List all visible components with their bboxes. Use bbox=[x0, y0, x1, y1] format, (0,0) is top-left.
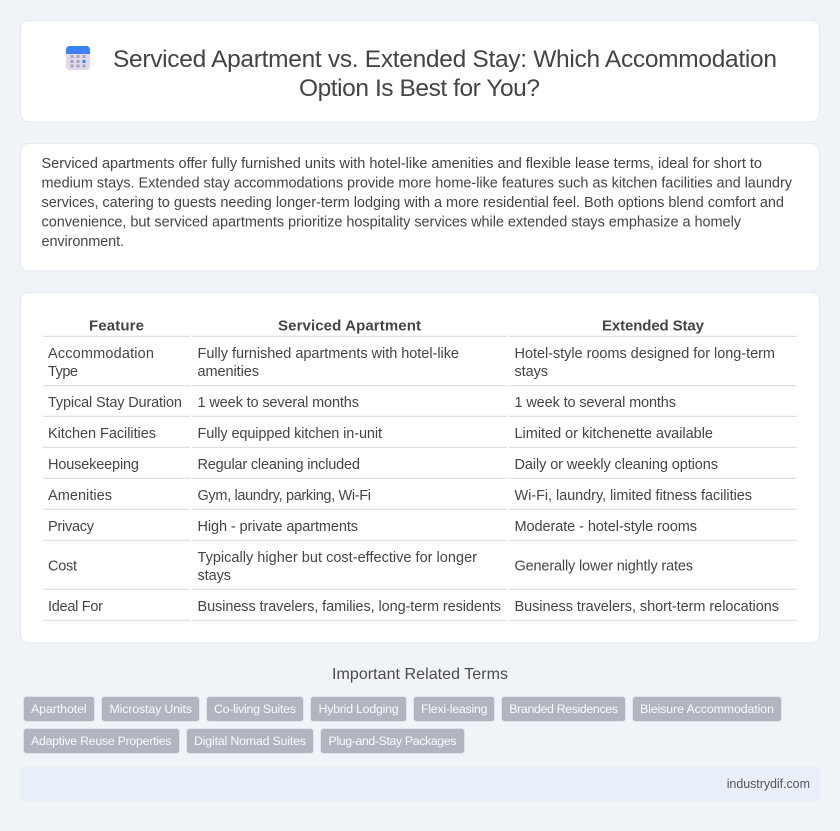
row: typical stay duration: 1 week to several months bbox=[514, 395, 676, 411]
related term tags bbox=[24, 696, 782, 754]
tag: Co-living Suites: Co-living Suites bbox=[214, 702, 296, 716]
title: Serviced Apartment vs. Extended Stay: Which Accommodation bbox=[113, 46, 777, 73]
row: ideal for: Business travelers, short-term relocations bbox=[514, 599, 779, 615]
row: ideal for bbox=[48, 599, 779, 615]
row: privacy: Privacy bbox=[48, 519, 95, 535]
tag: Flexi-leasing bbox=[414, 696, 494, 722]
row: amenities: Wi-Fi, laundry, limited fitness facilities bbox=[514, 488, 752, 504]
row: accommodation type: amenities bbox=[198, 364, 259, 380]
panel: title header bbox=[20, 20, 820, 122]
row: cost: stays bbox=[198, 568, 231, 584]
row: kitchen facilities: Kitchen Facilities bbox=[48, 426, 156, 442]
tag: Plug-and-Stay Packages: Plug-and-Stay Packages bbox=[328, 734, 456, 748]
tag: Aparthotel: Aparthotel bbox=[31, 702, 87, 716]
tag: Branded Residences bbox=[502, 696, 626, 722]
tag: Digital Nomad Suites bbox=[186, 728, 314, 754]
row: privacy: Moderate - hotel-style rooms bbox=[514, 519, 697, 535]
tag: Microstay Units: Microstay Units bbox=[110, 702, 192, 716]
intro paragraph: convenience, but serviced apartments prioritize hospitality services while extended stays emphasize a homely bbox=[42, 215, 742, 231]
table header row: Serviced Apartment bbox=[278, 318, 421, 335]
footer source text: industrydif.com bbox=[727, 777, 810, 791]
row: typical stay duration: Typical Stay Duration bbox=[48, 395, 182, 411]
row: ideal for: Business travelers, families, long-term residents bbox=[198, 599, 501, 615]
tag: Aparthotel bbox=[24, 696, 94, 722]
row: cost: Cost bbox=[48, 558, 77, 574]
tag: Adaptive Reuse Properties: Adaptive Reuse Properties bbox=[31, 734, 172, 748]
row: accommodation type: Type bbox=[48, 364, 78, 380]
row: accommodation type: stays bbox=[514, 364, 548, 380]
table header row: Extended Stay bbox=[602, 318, 705, 335]
tag: Hybrid Lodging: Hybrid Lodging bbox=[318, 702, 399, 716]
row: accommodation type: Accommodation bbox=[48, 346, 154, 362]
row: privacy: High - private apartments bbox=[198, 519, 358, 535]
tag: Flexi-leasing: Flexi-leasing bbox=[421, 702, 488, 716]
tag: Microstay Units bbox=[102, 696, 200, 722]
intro paragraph: Serviced apartments offer fully furnished units with hotel-like amenities and flexible lease terms, ideal for short to bbox=[42, 156, 762, 172]
panel: introduction bbox=[20, 144, 820, 271]
tag: Digital Nomad Suites: Digital Nomad Suites bbox=[194, 734, 306, 748]
intro paragraph: medium stays. Extended stay accommodations provide more home-like features such as kitchen facilities and laundry bbox=[42, 176, 793, 192]
row: accommodation type bbox=[48, 346, 775, 380]
tag: Hybrid Lodging bbox=[310, 696, 406, 722]
row: amenities bbox=[48, 488, 752, 504]
table grid lines bbox=[43, 336, 797, 620]
row: typical stay duration: 1 week to several months bbox=[198, 395, 359, 411]
intro paragraph: environment. bbox=[42, 234, 124, 250]
row: housekeeping: Housekeeping bbox=[48, 457, 139, 473]
tag: Co-living Suites bbox=[206, 696, 304, 722]
tag: Branded Residences: Branded Residences bbox=[509, 702, 618, 716]
row: cost bbox=[48, 550, 693, 584]
title bbox=[113, 46, 777, 102]
tag: Bleisure Accommodation: Bleisure Accommodation bbox=[640, 702, 774, 716]
panel: comparison table bbox=[20, 292, 820, 643]
row: ideal for: Ideal For bbox=[48, 599, 103, 615]
heading: important related terms: Important Related Terms bbox=[332, 666, 508, 683]
row: housekeeping: Regular cleaning included bbox=[198, 457, 360, 473]
row: kitchen facilities bbox=[48, 426, 713, 442]
row: housekeeping: Daily or weekly cleaning options bbox=[514, 457, 718, 473]
row: cost: Typically higher but cost-effective for longer bbox=[198, 550, 477, 566]
row: amenities: Amenities bbox=[48, 488, 112, 504]
footer bar bbox=[20, 767, 820, 801]
row: amenities: Gym, laundry, parking, Wi-Fi bbox=[198, 488, 371, 504]
title: Option Is Best for You? bbox=[299, 75, 540, 102]
row: housekeeping bbox=[48, 457, 718, 473]
row: privacy bbox=[48, 519, 697, 535]
table header row bbox=[89, 318, 705, 335]
icon: calendar bbox=[66, 46, 90, 70]
row: accommodation type: Fully furnished apartments with hotel-like bbox=[198, 346, 459, 362]
row: accommodation type: Hotel-style rooms designed for long-term bbox=[514, 346, 775, 362]
row: kitchen facilities: Fully equipped kitchen in-unit bbox=[198, 426, 382, 442]
tag: Adaptive Reuse Properties bbox=[24, 728, 180, 754]
row: kitchen facilities: Limited or kitchenette available bbox=[514, 426, 713, 442]
tag: Bleisure Accommodation bbox=[632, 696, 782, 722]
tag: Plug-and-Stay Packages bbox=[320, 728, 464, 754]
intro paragraph bbox=[42, 156, 793, 250]
table header row: Feature bbox=[89, 318, 144, 335]
intro paragraph: services, catering to guests needing longer-term lodging with a more residential feel. Both options blend comfort and bbox=[42, 195, 784, 211]
row: cost: Generally lower nightly rates bbox=[514, 558, 693, 574]
row: typical stay duration bbox=[48, 395, 676, 411]
